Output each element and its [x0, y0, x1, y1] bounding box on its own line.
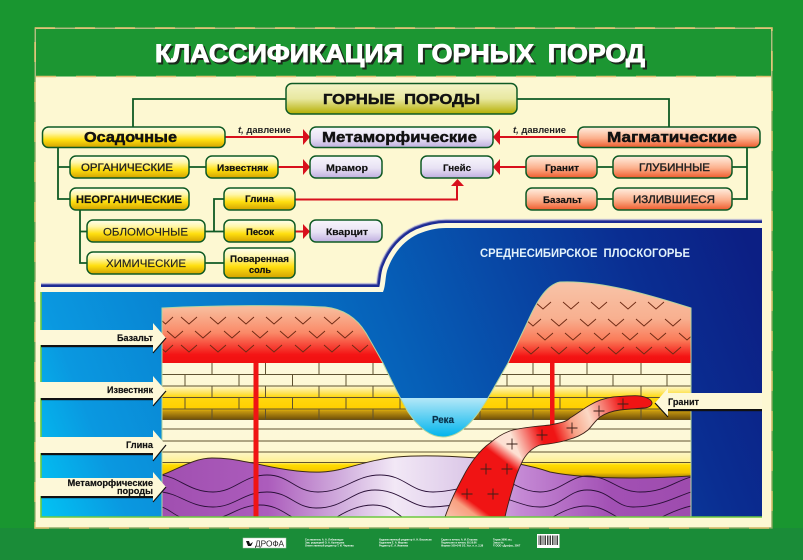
imprint block 1: Зав. редакцией О. А. Кузнецова: [305, 542, 345, 544]
box: базальт: Базальт: [543, 195, 582, 206]
title: КЛАССИФИКАЦИЯ ГОРНЫХ ПОРОД: [155, 40, 645, 68]
box: гранит: Гранит: [545, 163, 579, 174]
box: глина: [224, 188, 295, 210]
imprint block 4: [493, 538, 521, 548]
box: песок: [224, 220, 295, 242]
box: мрамор: Мрамор: [326, 163, 368, 174]
box: известняк: Известняк: [217, 163, 268, 174]
imprint block 3: Сдано в печать А. И. Егорова: [441, 538, 478, 542]
box: глубинные: ГЛУБИННЫЕ: [639, 162, 710, 174]
barcode: [537, 534, 560, 548]
imprint block 2: Редактор Е. А. Иванова: [379, 544, 409, 548]
basalt layer left: [162, 306, 382, 363]
imprint block 2: Художественный редактор А. Н. Васильев: [379, 538, 432, 542]
box: мрамор: [310, 156, 382, 178]
red arrows: [225, 129, 578, 239]
arrow: известняк: [36, 376, 166, 406]
box: поваренная соль: соль: [249, 265, 271, 276]
arrow: известняк: Известняк: [107, 385, 153, 396]
box: горные породы: ГОРНЫЕ ПОРОДЫ: [323, 92, 480, 108]
arrow: метаморфические породы: [36, 472, 166, 502]
imprint block 2: [379, 538, 432, 548]
box: осадочные: Осадочные: [84, 129, 177, 146]
box: гнейс: [421, 156, 493, 178]
arrow: глина: Глина: [126, 440, 154, 451]
logo: дрофа: [243, 538, 286, 548]
imprint block 4: Заказ №: [493, 542, 504, 544]
river: Река: [432, 415, 454, 426]
imprint block 1: Ответственный редактор Т. И. Чернова: [305, 544, 354, 548]
arrow: гранит: Гранит: [668, 397, 699, 408]
arrow: метаморфические породы: породы: [117, 486, 153, 496]
box: химические: [87, 252, 205, 274]
box: обломочные: [87, 220, 205, 242]
box: гранит: [526, 156, 597, 178]
label: temperature and pressure left: t, давление: [238, 125, 291, 135]
box: химические: ХИМИЧЕСКИЕ: [106, 258, 186, 270]
box: базальт: [526, 188, 597, 210]
imprint block 1: [305, 538, 354, 548]
river: [400, 398, 488, 437]
box: поваренная соль: [224, 248, 295, 278]
title: КЛАССИФИКАЦИЯ ГОРНЫХ ПОРОД: [157, 42, 647, 70]
granite intrusion: [444, 395, 652, 516]
plateau label: СРЕДНЕСИБИРСКОЕ ПЛОСКОГОРЬЕ: [480, 248, 690, 260]
imprint block 4: Тираж 3000 экз.: [493, 538, 512, 542]
box: горные породы: [286, 84, 517, 114]
box: глубинные: [613, 156, 732, 178]
arrow: базальт: Базальт: [117, 333, 153, 344]
box: неорганические: [70, 188, 189, 210]
box: осадочные: [42, 127, 225, 148]
box: обломочные: ОБЛОМОЧНЫЕ: [103, 226, 188, 238]
limestone brick layers: [162, 363, 691, 420]
imprint block 3: [441, 538, 484, 548]
box: излившиеся: ИЗЛИВШИЕСЯ: [633, 194, 715, 206]
imprint block 3: Подписано в печать 05.10.06: [441, 542, 477, 544]
box: поваренная соль: Поваренная: [230, 254, 289, 265]
basalt feeder dike left: [254, 363, 258, 517]
geological cross-section: [158, 275, 695, 520]
box: органические: ОРГАНИЧЕСКИЕ: [81, 162, 173, 174]
imprint block 2: Художник Е. А. Марова: [379, 542, 408, 544]
box: гнейс: Гнейс: [443, 163, 471, 173]
header band: [36, 29, 771, 76]
box: неорганические: НЕОРГАНИЧЕСКИЕ: [76, 194, 182, 206]
arrow: гранит: [655, 388, 762, 417]
box: органические: [70, 156, 189, 178]
box: метаморфические: Метаморфические: [322, 129, 477, 146]
imprint block 3: Формат 100×140 1/2. Усл. п. л. 2,38: [441, 544, 484, 548]
diagram backdrop with stepped outline: [36, 215, 770, 527]
arrow: метаморфические породы: Метаморфические: [68, 478, 153, 488]
basalt feeder dike right: [550, 363, 554, 427]
box: излившиеся: [613, 188, 732, 210]
arrow: глина: [36, 430, 166, 461]
box: метаморфические: [310, 127, 493, 148]
basalt layer right: [508, 282, 691, 363]
label: temperature and pressure right: t, давление: [513, 125, 566, 135]
box: магматические: [578, 127, 760, 148]
box: песок: Песок: [246, 227, 274, 238]
box: магматические: Магматические: [607, 129, 737, 146]
mountain outline: [162, 282, 691, 517]
connector lines: [58, 99, 747, 263]
clay layers: [162, 420, 691, 480]
imprint block 1: Составитель А. А. Лобжанидзе: [305, 538, 344, 542]
base and side lime line: [41, 292, 762, 517]
imprint block 4: © ООО «Дрофа», 2007: [493, 544, 521, 548]
arrow: базальт: [36, 323, 166, 353]
logo: дрофа: ДРОФА: [255, 540, 285, 548]
box: кварцит: Кварцит: [326, 227, 368, 238]
box: известняк: [206, 156, 278, 178]
metamorphic rock layer: [162, 456, 691, 517]
box: глина: Глина: [245, 194, 275, 205]
box: кварцит: [310, 220, 382, 242]
